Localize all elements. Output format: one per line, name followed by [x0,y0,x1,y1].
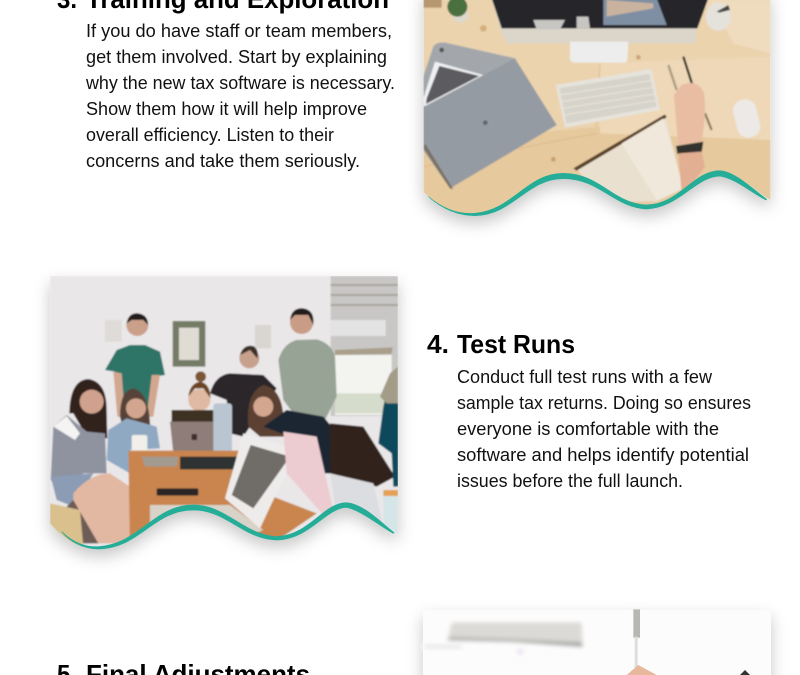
step 4 body text: software and helps identify potential [457,445,749,465]
photo: blurred desk with hand holding pen [423,609,771,675]
photo: team gathered around laptops [50,276,398,553]
step 3 body text: overall efficiency. Listen to their [86,125,334,145]
step 4 body text: Conduct full test runs with a few [457,367,713,387]
step 4 heading: 4. [427,329,449,359]
step 3 body text: Show them how it will help improve [86,99,367,119]
step 3 body text: If you do have staff or team members, [86,21,392,41]
panel: step 3 training and exploration [57,0,771,223]
panel: step 5 final adjustments [57,609,771,675]
step 4 body text: sample tax returns. Doing so ensures [457,393,751,413]
step 4 body text: issues before the full launch. [457,471,683,491]
teal wave [428,171,767,216]
people [126,318,149,337]
step 3 body text [85,21,395,171]
desk items [495,8,698,44]
photo: desk with monitor, keyboard and hand [423,0,771,223]
teal wave [62,503,394,549]
step 3 body text: concerns and take them seriously. [86,151,360,171]
step 3 body text: get them involved. Start by explaining [86,47,387,67]
step 4 body text: everyone is comfortable with the [457,419,719,439]
table [128,450,317,536]
panel: step 4 test runs [50,276,751,553]
step 4 body text [457,367,751,491]
step 4 heading: Test Runs [457,329,575,359]
step 3 body text: why the new tax software is necessary. [85,73,395,93]
